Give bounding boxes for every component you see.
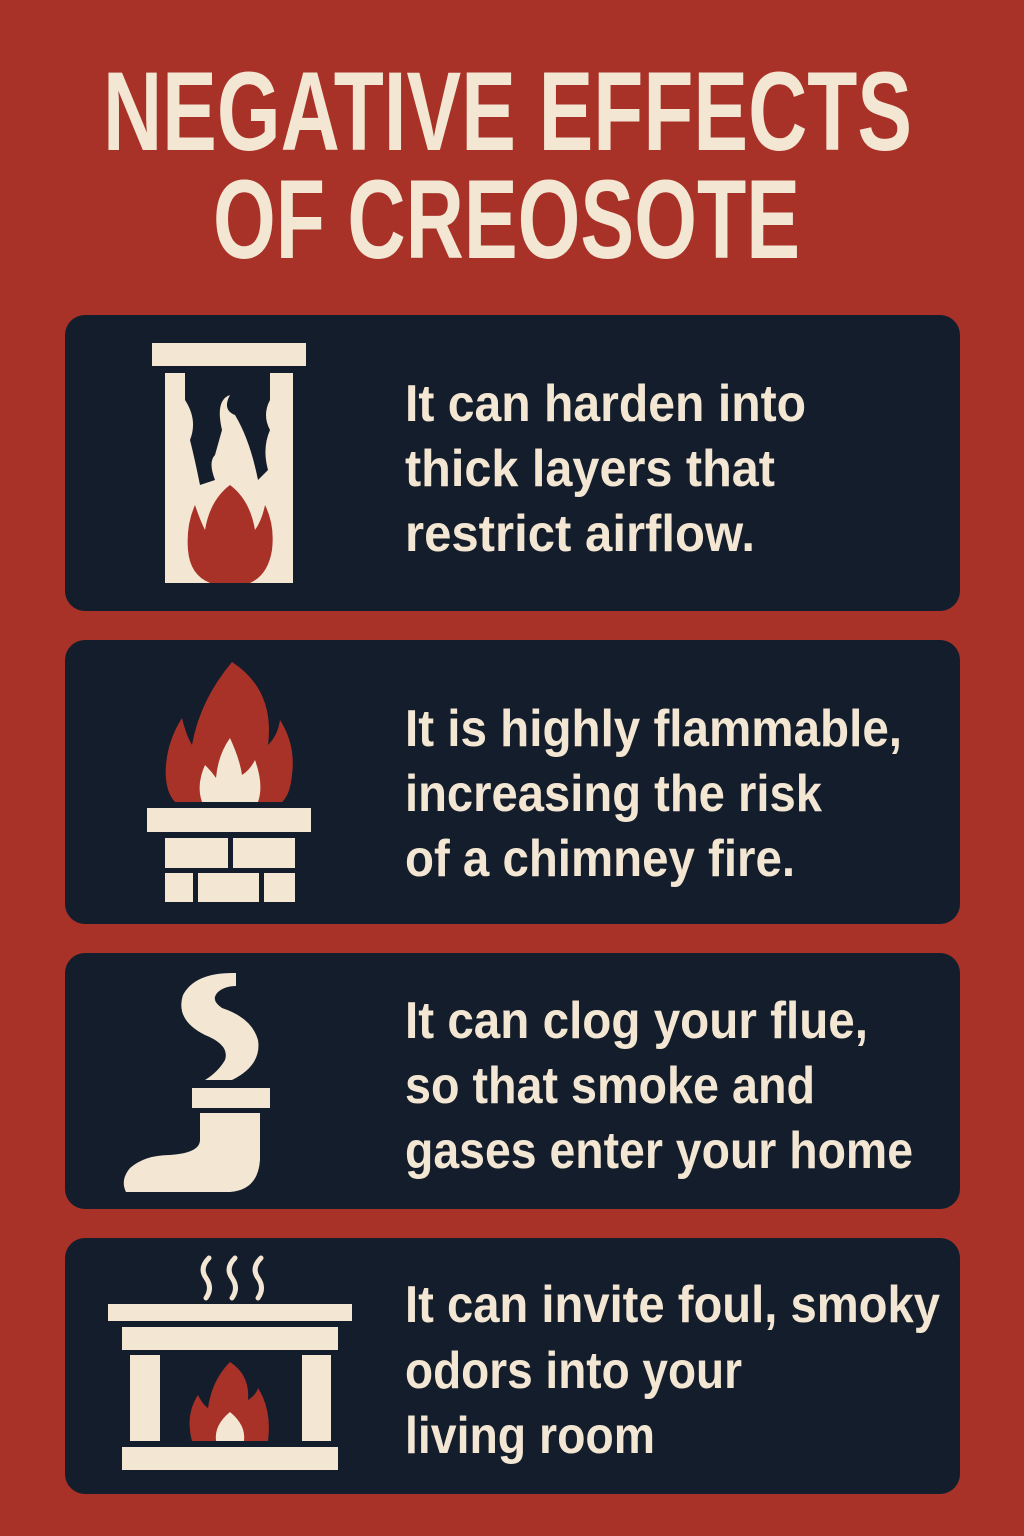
- icon: chimney with smoke and flame: [152, 343, 306, 583]
- icon: smoke from bent flue pipe: [124, 973, 270, 1192]
- title: [103, 49, 912, 282]
- text: clogged flue: It can clog your flue,: [405, 992, 868, 1050]
- text: flammable: increasing the risk: [405, 765, 822, 823]
- text: odors: living room: [405, 1407, 655, 1465]
- text: odors: It can invite foul, smoky: [405, 1276, 940, 1334]
- text: restrict airflow: It can harden into: [405, 375, 806, 433]
- text: odors: odors into your: [405, 1342, 742, 1400]
- text: odors: [405, 1276, 940, 1465]
- panel: flammable: [65, 640, 960, 924]
- text: flammable: of a chimney fire.: [405, 830, 795, 888]
- text: flammable: [405, 700, 902, 888]
- text: restrict airflow: thick layers that: [405, 440, 775, 498]
- panel: restrict airflow: [65, 315, 960, 611]
- text: restrict airflow: [405, 375, 806, 563]
- text: clogged flue: [405, 992, 913, 1180]
- panel: clogged flue: [65, 953, 960, 1209]
- text: flammable: It is highly flammable,: [405, 700, 902, 758]
- panel: odors: [65, 1238, 960, 1494]
- icon: flame over brick chimney: [147, 662, 311, 902]
- title: OF CREOSOTE: [213, 157, 800, 282]
- icon: fireplace with fumes: [108, 1258, 352, 1470]
- text: clogged flue: gases enter your home: [405, 1122, 913, 1180]
- text: restrict airflow: restrict airflow.: [405, 505, 755, 563]
- text: clogged flue: so that smoke and: [405, 1057, 815, 1115]
